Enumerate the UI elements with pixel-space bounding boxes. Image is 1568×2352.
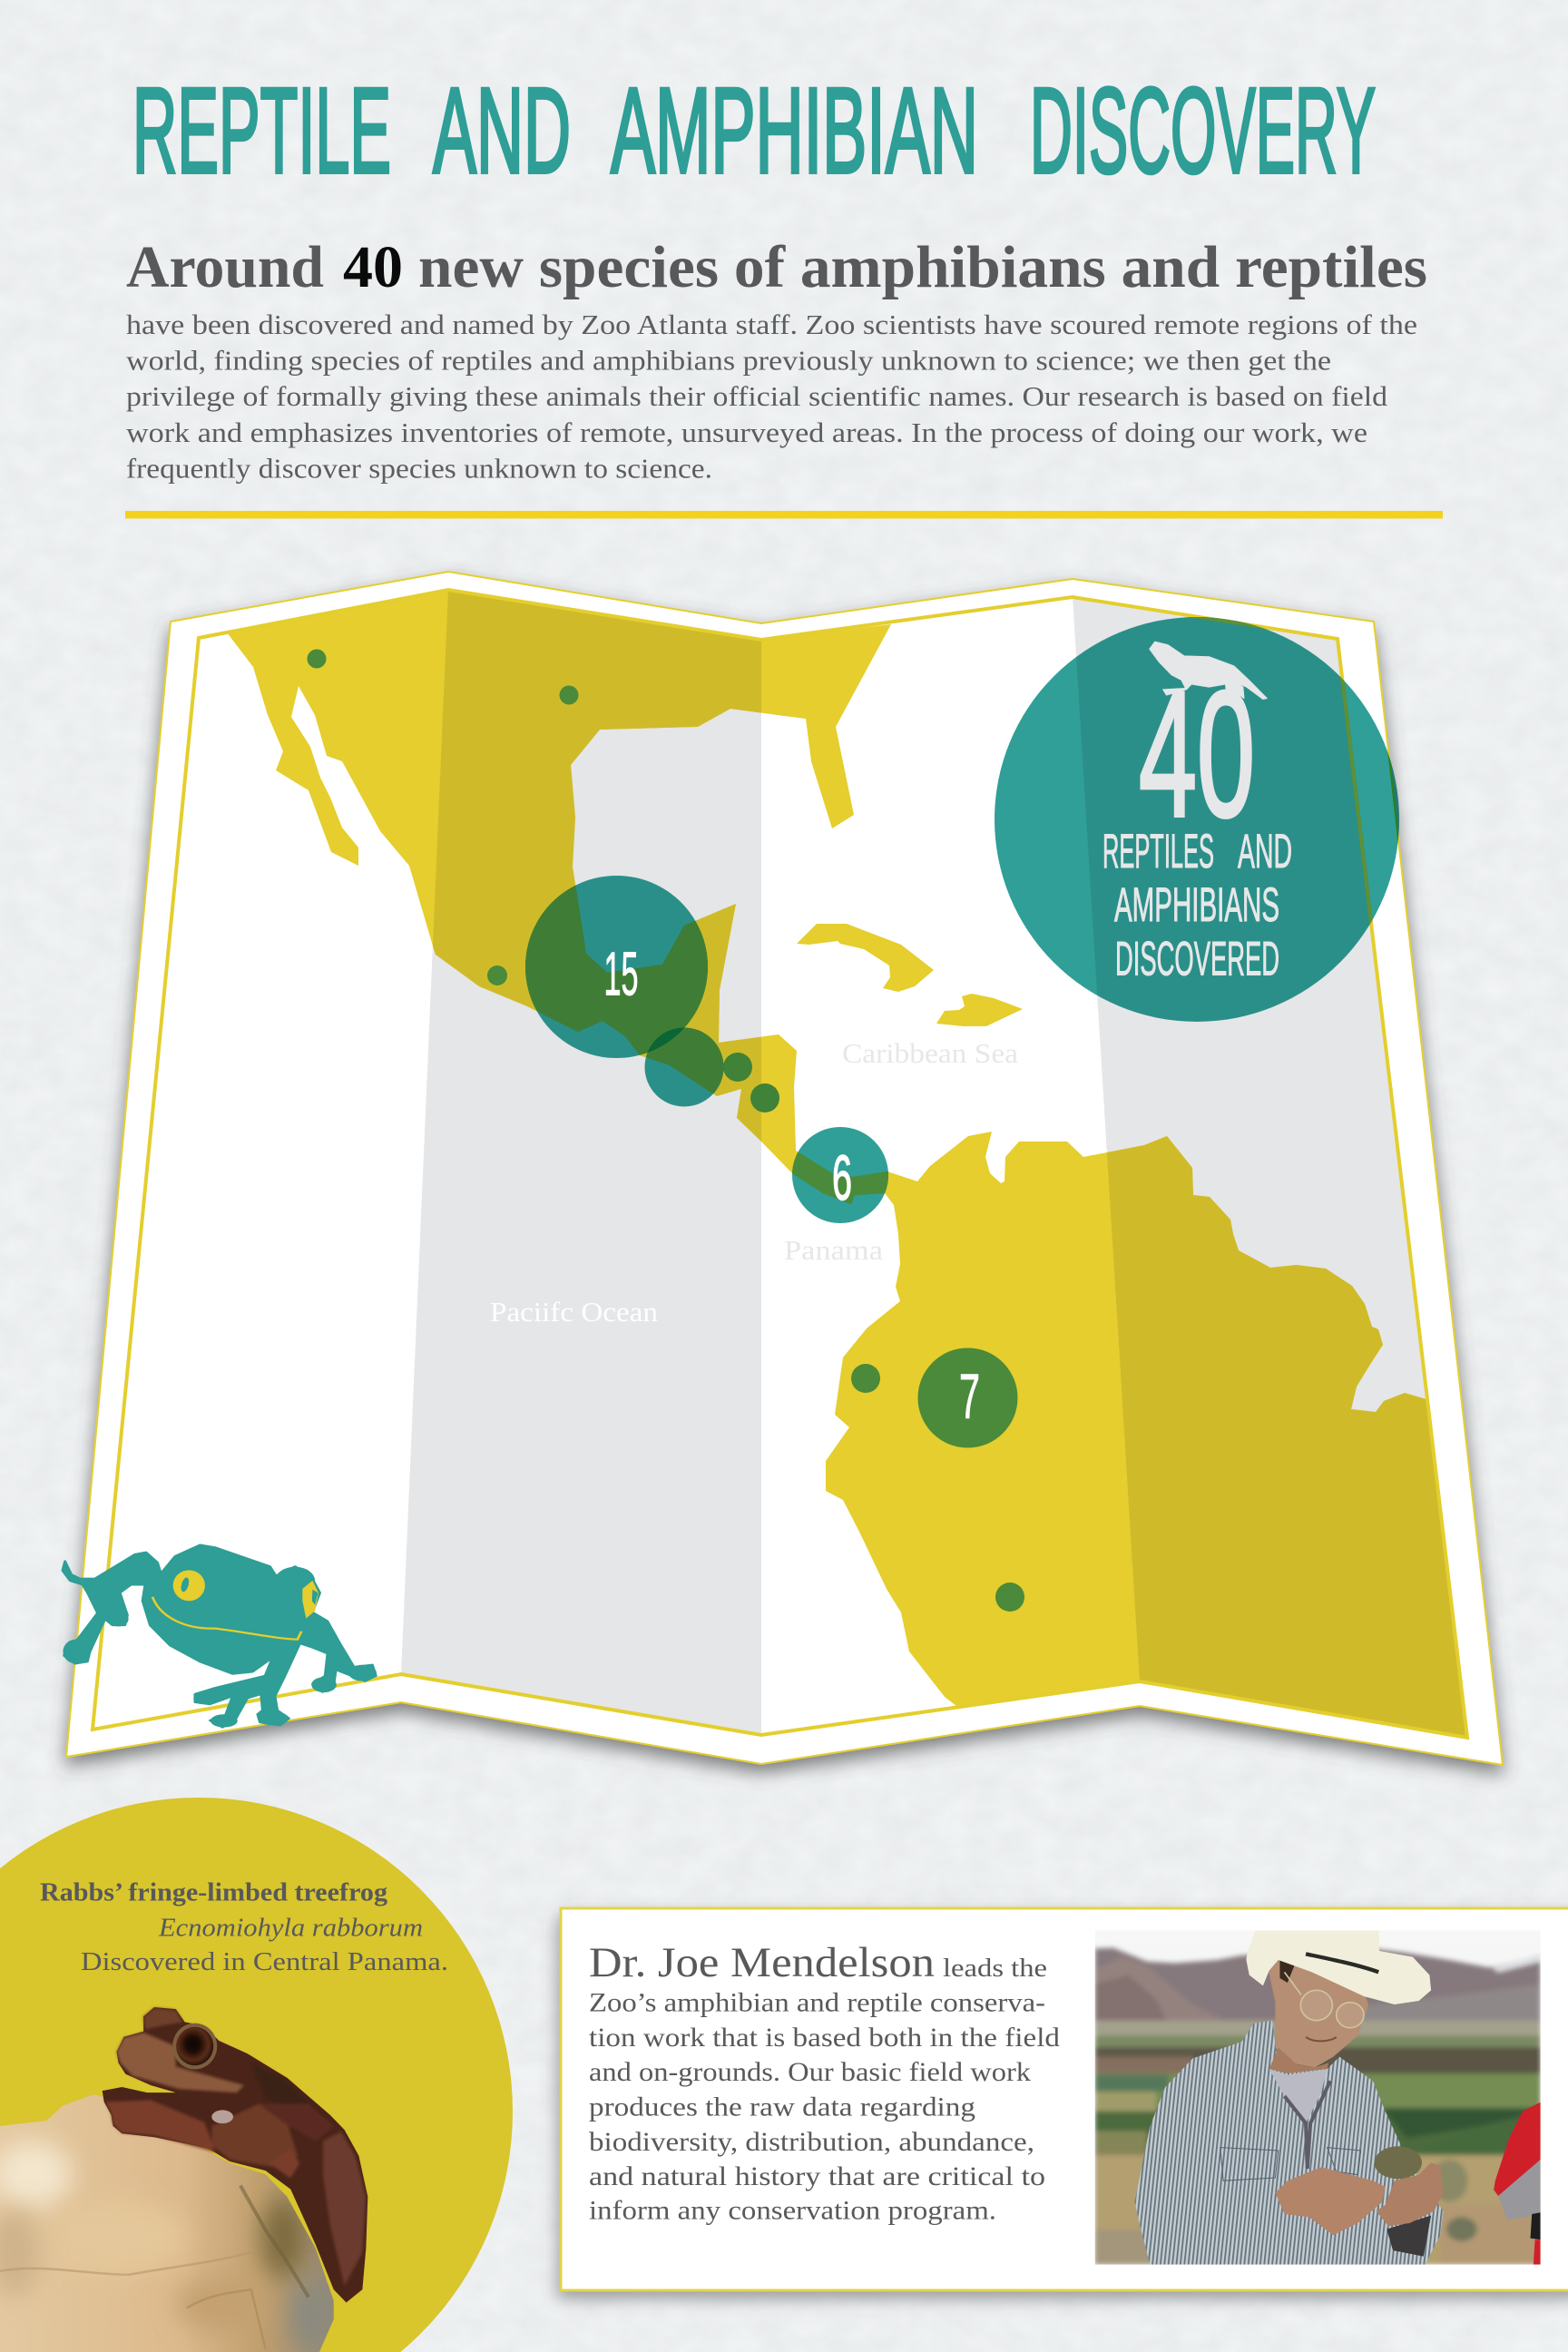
heading: around 40 new species: new species of amphibians and reptiles [418, 234, 1427, 300]
bio text: and natural history that are critical to [589, 2162, 1045, 2191]
count circle: 6 in Panama [792, 1127, 888, 1223]
hands and toad [1387, 2216, 1431, 2257]
intro text block: world, finding species of reptiles and amphibians previously unknown to science; we then get the [126, 345, 1331, 376]
location dot: west Mexico [487, 965, 507, 985]
intro text block: frequently discover species unknown to science. [126, 452, 712, 485]
count circle: 7 in Ecuador: 7 [959, 1361, 980, 1432]
bio heading: Dr. Joe Mendelson [589, 1939, 935, 1986]
grey fold panel: west [401, 590, 761, 1735]
label: Pacific Ocean: Paciifc Ocean [490, 1296, 659, 1328]
photo: Dr. Mendelson holding a toad [1095, 1930, 1541, 2265]
location dot: Honduras [723, 1053, 752, 1082]
title: AMPHIBIAN [611, 64, 978, 199]
folded map [63, 572, 1503, 1765]
bystander [1494, 2102, 1541, 2196]
grey fold panel: east [1073, 597, 1467, 1738]
big total circle: 40 reptiles and amphibians discovered [995, 617, 1399, 1022]
face [1268, 1960, 1368, 2067]
photo: frog on rock [0, 2007, 368, 2352]
caption lines: AMPHIBIANS [1114, 878, 1279, 932]
bio text: and on-grounds. Our basic field work [589, 2058, 1031, 2087]
count circle: 6 in Panama: 6 [832, 1142, 852, 1213]
title: AND [433, 64, 571, 199]
count circle: 15 in Mexico [525, 876, 708, 1058]
caption: species name and location: Discovered in Central Panama. [81, 1947, 448, 1976]
caption lines [1102, 825, 1292, 985]
intro text block: work and emphasizes inventories of remote, unsurveyed areas. In the process of doing our work, we [126, 416, 1367, 448]
location dot: north Mexico [559, 686, 579, 704]
count circle: 7 in Ecuador [918, 1348, 1018, 1448]
icon: teal tree frog [63, 1545, 377, 1728]
caption lines: DISCOVERED [1115, 933, 1279, 985]
intro text block: have been discovered and named by Zoo Atlanta staff. Zoo scientists have scoured remote regions of the [126, 309, 1417, 340]
bio text: biodiversity, distribution, abundance, [589, 2128, 1034, 2157]
heading: around 40 new species: Around [126, 234, 324, 300]
caption: species name and location: Ecnomiohyla rabborum [158, 1913, 423, 1942]
card background [561, 1908, 1568, 2290]
caption: species name and location: Rabbs’ fringe-limbed treefrog [40, 1878, 388, 1907]
label: Panama: Panama [784, 1234, 883, 1266]
bio text [589, 1989, 1060, 2225]
yellow circle panel: treefrog [0, 1798, 513, 2352]
shirt [1135, 2021, 1444, 2265]
caption: species name and location [40, 1878, 448, 1976]
bio text: inform any conservation program. [589, 2196, 996, 2225]
map inner border [93, 590, 1467, 1738]
title: REPTILE [132, 64, 391, 199]
land masses: North, Central and South America [227, 590, 1467, 1738]
number 40: 40 [1139, 654, 1255, 854]
bio heading: leads the [943, 1954, 1047, 1983]
label: Caribbean Sea: Caribbean Sea [842, 1037, 1018, 1069]
location dot: Nicaragua [750, 1083, 779, 1112]
small teal circle: Guatemala [644, 1027, 724, 1107]
heading: around 40 new species: 40 [343, 234, 403, 300]
caption lines: AND [1238, 825, 1292, 878]
location dot: Ecuador [851, 1364, 880, 1393]
bio text: Zoo’s amphibian and reptile conserva- [589, 1989, 1045, 2018]
location dot: Baja [307, 650, 327, 668]
bio text: tion work that is based both in the field [589, 2024, 1060, 2053]
intro text block: privilege of formally giving these animals their official scientific names. Our research is based on field [126, 380, 1388, 412]
bio card [561, 1908, 1568, 2290]
yellow divider rule [125, 511, 1443, 519]
intro text block [126, 309, 1417, 485]
title [132, 64, 1376, 199]
caption lines: REPTILES [1102, 825, 1214, 878]
map paper sheet [66, 572, 1503, 1765]
bio text: produces the raw data regarding [589, 2092, 975, 2122]
hat [1246, 1930, 1431, 2004]
count circle: 15 in Mexico: 15 [604, 940, 639, 1009]
location dot: Peru [995, 1583, 1024, 1612]
icon: lizard silhouette [1150, 642, 1267, 700]
